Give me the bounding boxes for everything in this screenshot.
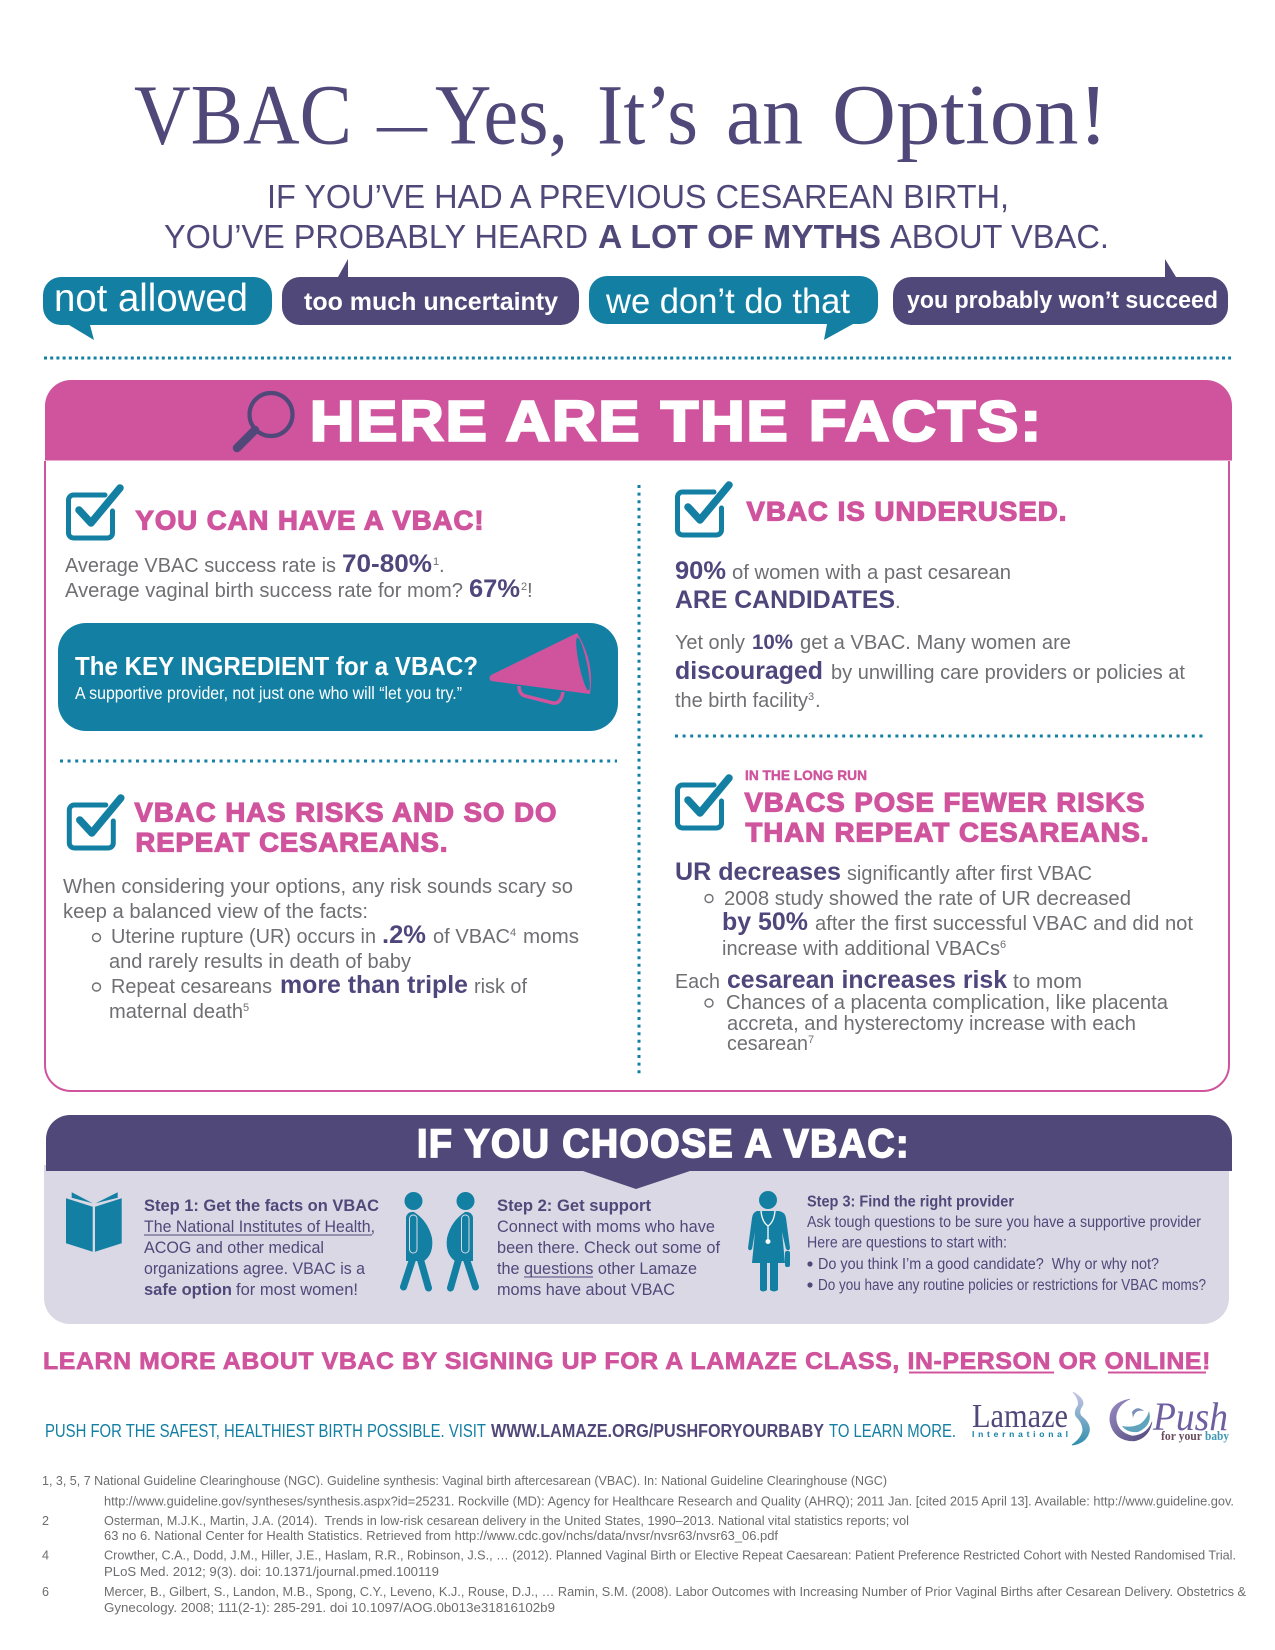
block: vbac has risks xyxy=(63,798,579,1023)
step 2 xyxy=(497,1197,720,1299)
success rates: . xyxy=(439,554,445,577)
icon: checkbox xyxy=(678,485,729,535)
subtitle: YOU’VE PROBABLY HEARD xyxy=(164,218,588,255)
step 2: Step 2: Get support xyxy=(497,1197,652,1215)
bubble: we don't do that xyxy=(589,276,878,340)
bubble: we don't do that: we don’t do that xyxy=(605,282,850,321)
step 1: for most women! xyxy=(236,1281,358,1299)
step 3: Ask tough questions to be sure you have a supportive provider xyxy=(807,1214,1201,1231)
body text: accreta, and hysterectomy increase with each xyxy=(727,1012,1136,1035)
callout: key ingredient: A supportive provider, not just one who will “let you try.” xyxy=(75,683,462,703)
heading: VBAC IS UNDERUSED. xyxy=(746,496,1068,526)
body text: after the first successful VBAC and did not xyxy=(815,912,1193,935)
title: VBAC xyxy=(134,68,352,162)
body text: of women with a past cesarean xyxy=(732,561,1011,584)
bubble: not allowed xyxy=(43,277,272,340)
logo: Lamaze International xyxy=(972,1392,1089,1445)
step 3: Do you think I’m a good candidate? Why or why not? xyxy=(818,1256,1159,1273)
body text: keep a balanced view of the facts: xyxy=(63,900,368,923)
body text: Chances of a placenta complication, like placenta xyxy=(726,991,1169,1014)
icon: open book xyxy=(66,1192,122,1252)
facts banner xyxy=(45,380,1232,460)
bubble: not allowed: not allowed xyxy=(54,277,248,320)
step 1: The National Institutes of Health, xyxy=(144,1218,375,1236)
heading: THAN REPEAT CESAREANS. xyxy=(746,818,1150,848)
facts heading: HERE ARE THE FACTS: xyxy=(310,390,1043,454)
panel: if you choose a vbac xyxy=(44,1115,1232,1324)
myth speech bubbles xyxy=(43,259,1228,340)
body text: Uterine rupture (UR) occurs in xyxy=(111,925,376,948)
panel: here are the facts xyxy=(45,380,1232,1091)
logo: Push for your baby: Push xyxy=(1152,1394,1228,1439)
block: vbacs pose fewer risks xyxy=(675,768,1193,1055)
step 2: Connect with moms who have xyxy=(497,1218,715,1236)
body text: 4 xyxy=(510,927,516,939)
title: Yes, xyxy=(435,68,568,162)
success rates: 2 xyxy=(521,581,527,593)
body text: When considering your options, any risk sounds scary so xyxy=(63,875,573,898)
step 3: Step 3: Find the right provider xyxy=(807,1194,1014,1210)
body text: Repeat cesareans xyxy=(111,975,272,998)
footnotes: 63 no 6. National Center for Health Statistics. Retrieved from http://www.cdc.gov/nchs/data/nvsr/nvsr63/nvsr63_06.pdf xyxy=(104,1529,779,1543)
logo: Push for your baby: for your xyxy=(1161,1429,1202,1443)
push for the safest line xyxy=(45,1421,956,1441)
success rates: 70-80% xyxy=(342,550,432,578)
logo: Lamaze International: International xyxy=(972,1429,1068,1439)
body text: cesarean xyxy=(727,1032,808,1055)
success rates: Average vaginal birth success rate for mom? xyxy=(65,579,463,602)
body text: maternal death xyxy=(109,1000,243,1023)
icon: checkbox xyxy=(68,488,120,538)
icon: two pregnant women xyxy=(404,1192,476,1288)
choose banner xyxy=(46,1115,1232,1189)
push for the safest line: TO LEARN MORE. xyxy=(829,1421,956,1441)
body text: UR decreases xyxy=(675,858,841,886)
footnotes: http://www.guideline.gov/syntheses/synthesis.aspx?id=25231. Rockville (MD): Agency for Healthcare Research and Quality (AHRQ); 2011 Jan. [cited 2015 April 13]. Available: http://www.guideline.gov. xyxy=(104,1494,1234,1508)
icon: checkbox xyxy=(678,778,729,828)
body text: ARE CANDIDATES xyxy=(675,586,895,614)
body text: significantly after first VBAC xyxy=(847,862,1092,885)
body text: 7 xyxy=(808,1034,814,1046)
block: vbac is underused xyxy=(675,485,1185,712)
logo: Lamaze International: Lamaze xyxy=(972,1398,1068,1435)
body text: .2% xyxy=(382,921,426,949)
body text: 2008 study showed the rate of UR decreased xyxy=(724,887,1131,910)
body text: by unwilling care providers or policies at xyxy=(831,661,1185,684)
step 1: ACOG and other medical xyxy=(144,1239,324,1257)
body text: 3 xyxy=(808,691,814,703)
footnotes: 6 xyxy=(42,1585,49,1599)
panel outline xyxy=(45,461,1229,1091)
bubble: you probably won't succeed: you probably won’t succeed xyxy=(907,287,1218,314)
footnotes: PLoS Med. 2012; 9(3). doi: 10.1371/journal.pmed.100119 xyxy=(104,1565,439,1579)
body text: Yet only xyxy=(675,631,746,654)
body text: get a VBAC. Many women are xyxy=(800,631,1071,654)
callout: key ingredient: The KEY INGREDIENT for a VBAC? xyxy=(75,651,478,681)
footnotes: Osterman, M.J.K., Martin, J.A. (2014). Trends in low-risk cesarean delivery in the United States, 1990–2013. National vital statistics reports; vol xyxy=(104,1514,909,1528)
logo: Push for your baby xyxy=(1110,1394,1230,1443)
body text: of VBAC xyxy=(433,925,510,948)
footnotes: 1, 3, 5, 7 National Guideline Clearinghouse (NGC). Guideline synthesis: Vaginal birth aftercesarean (VBAC). In: National Guideline Clearinghouse (NGC) xyxy=(42,1474,887,1488)
step 3: Here are questions to start with: xyxy=(807,1234,1007,1252)
footnotes: Gynecology. 2008; 111(2-1): 285-291. doi 10.1097/AOG.0b013e31816102b9 xyxy=(104,1601,555,1615)
call to action: LEARN MORE ABOUT VBAC BY SIGNING UP FOR A LAMAZE CLASS, IN-PERSON OR ONLINE! xyxy=(43,1348,1211,1375)
block: you can have a vbac xyxy=(65,488,533,603)
body text: and rarely results in death of baby xyxy=(109,950,412,973)
step 2: the questions other Lamaze xyxy=(497,1260,697,1278)
body text: the birth facility xyxy=(675,689,809,712)
push for the safest line: PUSH FOR THE SAFEST, HEALTHIEST BIRTH POSSIBLE. VISIT xyxy=(45,1421,486,1441)
body text: 6 xyxy=(1000,939,1006,951)
footnotes: Crowther, C.A., Dodd, J.M., Hiller, J.E., Haslam, R.R., Robinson, J.S., … (2012). Planned Vaginal Birth or Elective Repeat Caesarean: Patient Preference Restricted Cohort with Nested Randomised Trial. xyxy=(104,1548,1236,1562)
body text: by 50% xyxy=(722,908,808,936)
success rates: 1 xyxy=(433,556,439,568)
body text: moms xyxy=(523,925,579,948)
heading: YOU CAN HAVE A VBAC! xyxy=(136,506,484,536)
step 3 xyxy=(807,1194,1206,1294)
footnotes: 2 xyxy=(42,1514,49,1528)
subtitle: A LOT OF MYTHS xyxy=(598,218,881,255)
body text: risk of xyxy=(474,975,527,998)
step 1: organizations agree. VBAC is a xyxy=(144,1260,366,1278)
body text: 90% xyxy=(675,557,726,585)
body text: cesarean increases risk xyxy=(727,966,1007,994)
step 2: moms have about VBAC xyxy=(497,1281,675,1299)
body text: discouraged xyxy=(675,657,823,685)
heading: VBACS POSE FEWER RISKS xyxy=(744,788,1146,818)
success rates: 67% xyxy=(469,575,520,603)
icon: doctor with stethoscope xyxy=(748,1191,790,1292)
subtitle: IF YOU’VE HAD A PREVIOUS CESAREAN BIRTH, xyxy=(267,178,1009,215)
success rates: ! xyxy=(527,579,533,602)
footnotes xyxy=(42,1474,1247,1615)
title xyxy=(134,68,1108,162)
logo: Push for your baby: baby xyxy=(1205,1429,1230,1443)
subtitle: ABOUT VBAC. xyxy=(890,218,1109,255)
body text xyxy=(675,858,1193,1055)
step 2: been there. Check out some of xyxy=(497,1239,720,1257)
bubble: too much uncertainty xyxy=(282,259,579,325)
success rates xyxy=(65,550,533,603)
heading xyxy=(744,788,1150,848)
body text: Each xyxy=(675,970,720,993)
step 1 xyxy=(66,1192,379,1299)
body text xyxy=(63,875,579,1023)
success rates: Average VBAC success rate is xyxy=(65,554,336,577)
title: — xyxy=(376,85,428,162)
body text: to mom xyxy=(1013,970,1082,993)
title: Option! xyxy=(832,68,1108,162)
callout: key ingredient xyxy=(58,623,618,731)
step 3: Do you have any routine policies or restrictions for VBAC moms? xyxy=(818,1277,1206,1294)
title: It’s xyxy=(597,68,698,162)
steps background xyxy=(44,1165,1229,1324)
footnotes: Mercer, B., Gilbert, S., Landon, M.B., Spong, C.Y., Leveno, K.J., Rouse, D.J., … Ramin, S.M. (2008). Labor Outcomes with Increasing Number of Prior Vaginal Births after Cesarean Delivery. Obstetrics & xyxy=(104,1585,1247,1599)
bubble: you probably won't succeed xyxy=(893,259,1228,325)
bubble: too much uncertainty: too much uncertainty xyxy=(304,288,558,316)
body text: 5 xyxy=(243,1002,249,1014)
footnotes: 4 xyxy=(42,1548,49,1562)
body text: 10% xyxy=(752,631,793,654)
title: an xyxy=(726,68,803,162)
push for the safest line: WWW.LAMAZE.ORG/PUSHFORYOURBABY xyxy=(491,1421,824,1441)
heading: REPEAT CESAREANS. xyxy=(136,828,449,858)
subtitle xyxy=(164,178,1109,255)
body text xyxy=(675,557,1185,712)
body text: more than triple xyxy=(280,971,468,999)
step 1: Step 1: Get the facts on VBAC xyxy=(144,1197,379,1215)
body text: . xyxy=(895,590,901,613)
choose heading: IF YOU CHOOSE A VBAC: xyxy=(417,1122,910,1166)
body text: increase with additional VBACs xyxy=(722,937,1000,960)
icon: magnifying glass xyxy=(237,393,292,448)
step 1: safe option xyxy=(144,1281,232,1299)
body text: . xyxy=(815,689,821,712)
icon: megaphone xyxy=(490,633,593,703)
heading: VBAC HAS RISKS AND SO DO xyxy=(134,798,558,828)
kicker: IN THE LONG RUN xyxy=(745,768,867,783)
icon: checkbox xyxy=(69,798,121,848)
heading xyxy=(134,798,558,858)
